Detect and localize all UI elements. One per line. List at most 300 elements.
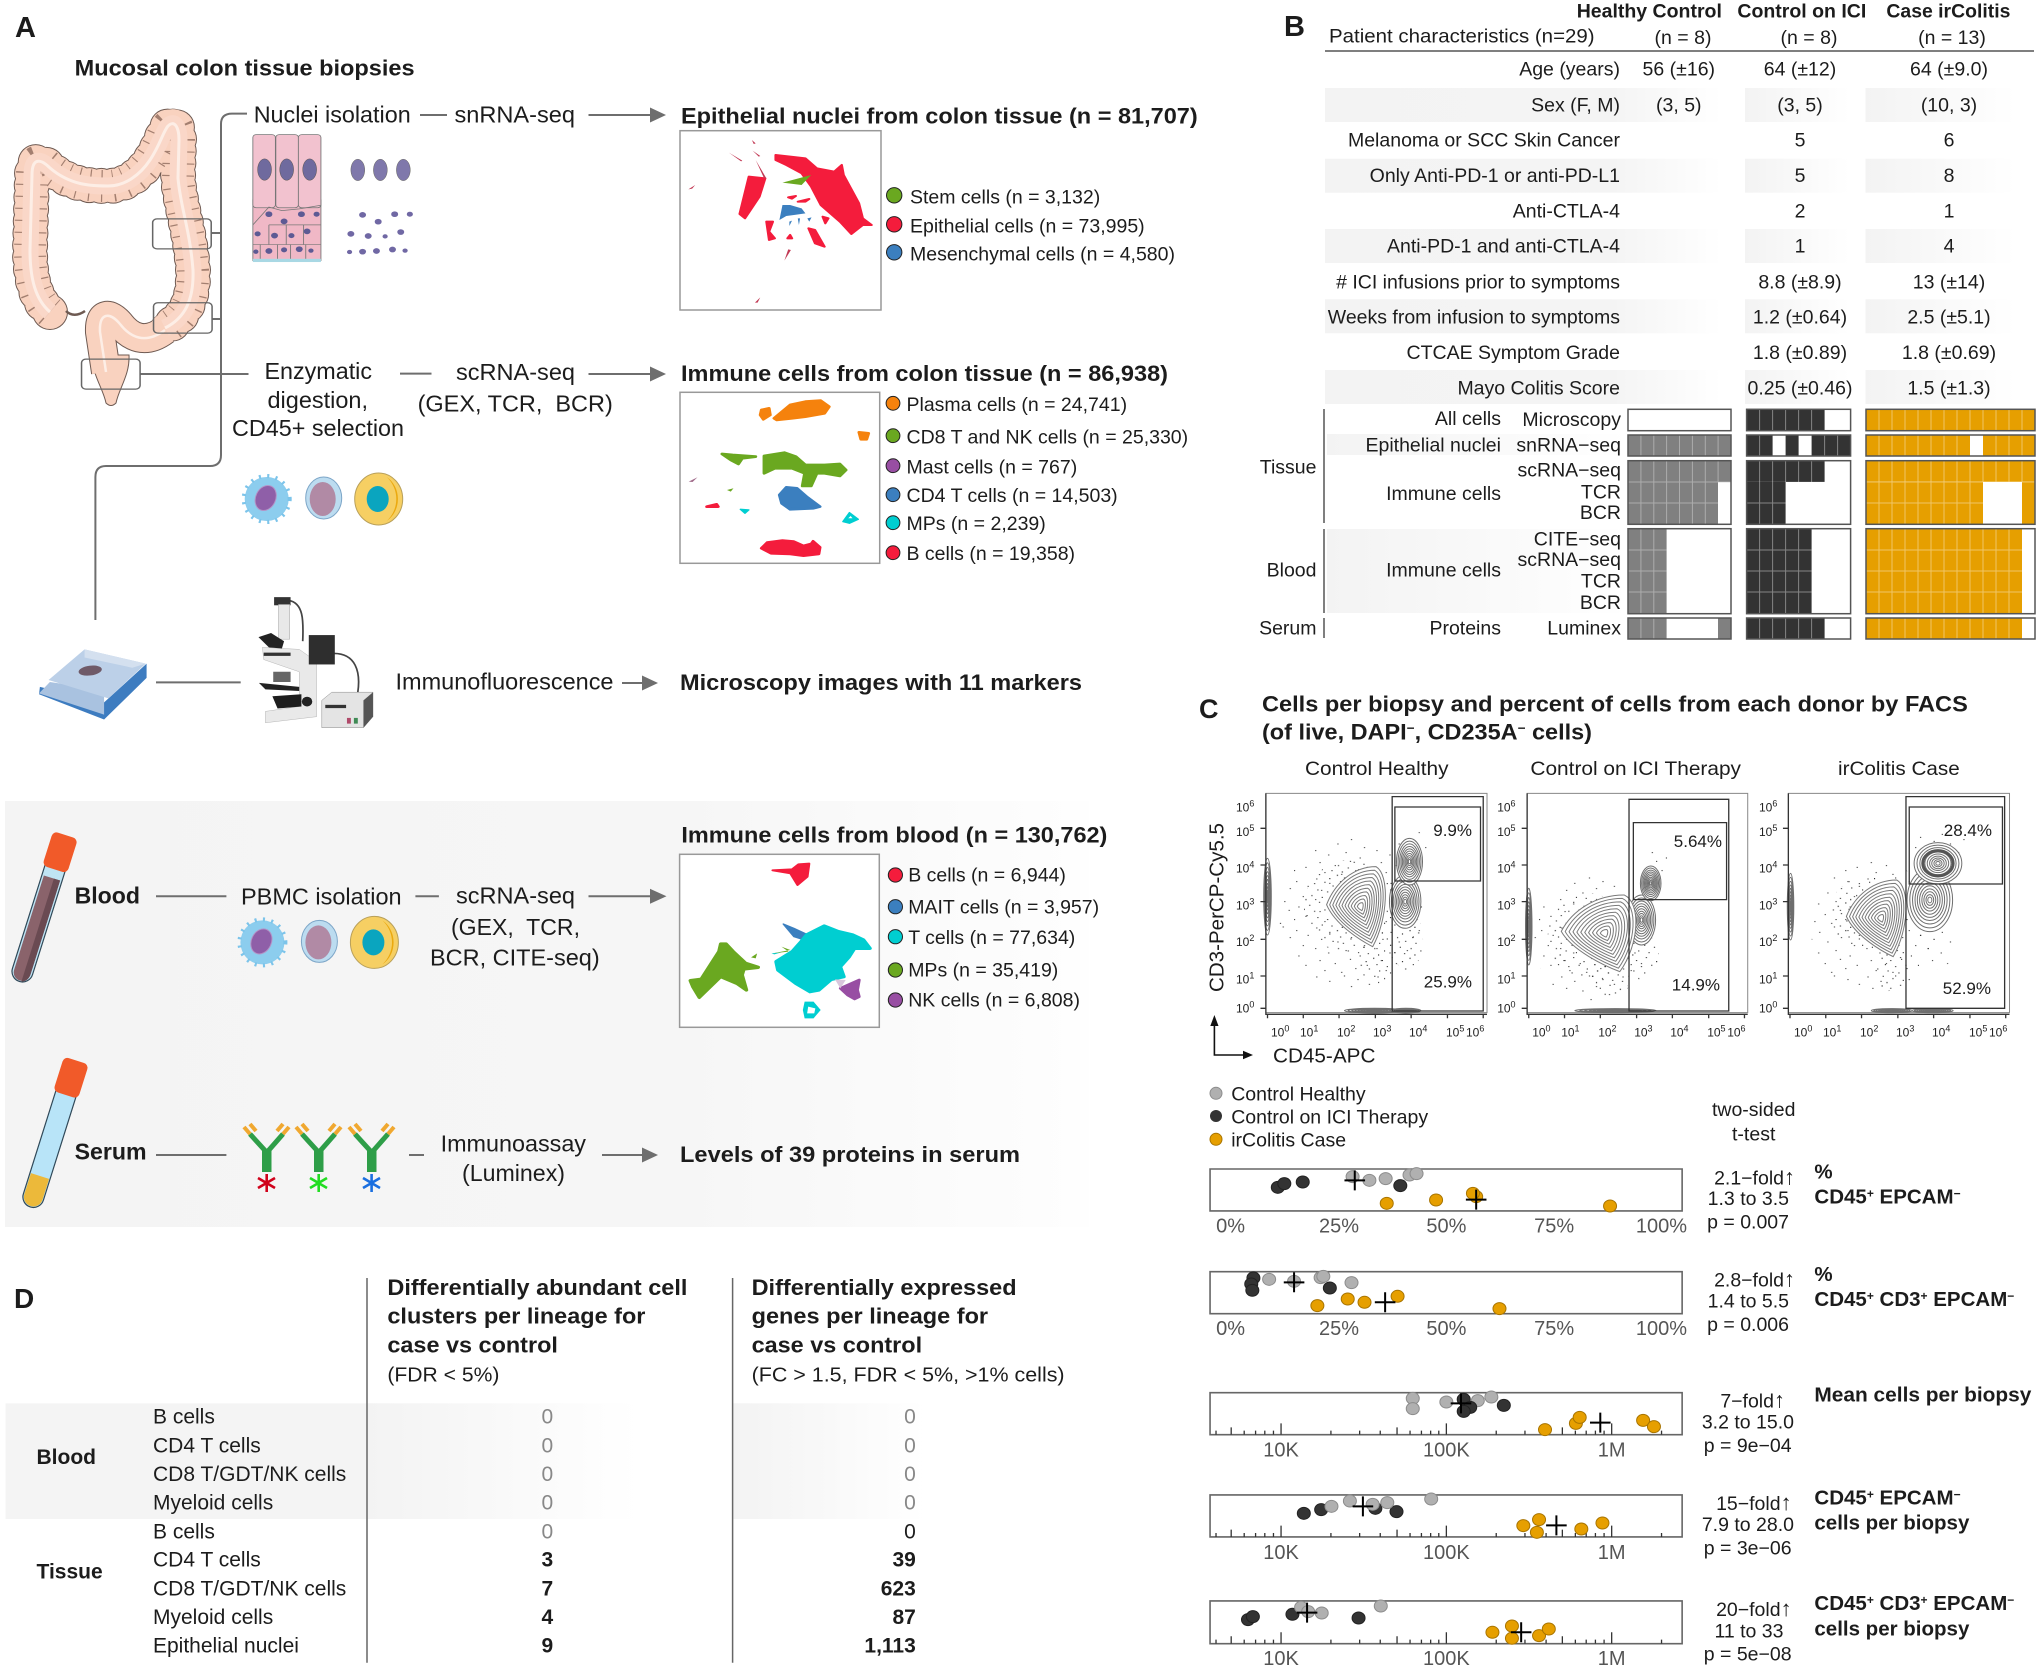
- icon: epithelial tissue and nuclei: [253, 135, 413, 262]
- flow plot: control on ICI: 4: [1511, 860, 1516, 870]
- strip plot: mean cells per biopsy: 10K: [1263, 1440, 1299, 1462]
- icon: immune cells tissue: [245, 473, 403, 525]
- sample matrix labels: Blood: [1267, 560, 1316, 582]
- strip plot: CD45+ EPCAM- cells per biopsy: −: [1954, 1487, 1961, 1501]
- sample matrix labels: scRNA−seq: [1518, 460, 1621, 482]
- chart: immune tissue UMAP: [680, 392, 880, 563]
- table values: 2.5 (±5.1): [1907, 307, 1991, 329]
- strip plot: mean cells per biopsy: p = 9e−04: [1704, 1435, 1792, 1457]
- flow plot: control healthy: 25.9%: [1424, 972, 1472, 992]
- flow plot: control on ICI: 4: [1684, 1024, 1689, 1034]
- strip plot: CD45+ EPCAM- cells per biopsy: 100K: [1423, 1542, 1470, 1564]
- y axis label: CD3-PerCP-Cy5.5: [1206, 823, 1229, 992]
- strip plot: percent CD45+ CD3+ EPCAM-: 75%: [1534, 1318, 1574, 1340]
- values: abundant clusters: 0: [542, 1434, 553, 1457]
- strip plot: percent CD45+ CD3+ EPCAM-: %: [1814, 1263, 1833, 1286]
- legend: donor groups: irColitis Case: [1231, 1130, 1346, 1152]
- values: abundant clusters: 0: [542, 1463, 553, 1486]
- flow plot: control on ICI: 10: [1497, 801, 1511, 815]
- flow plot: irColitis case: [1759, 793, 2010, 1040]
- panel A: study workflow: [7, 12, 1198, 1211]
- table row labels: [1328, 59, 1620, 399]
- strip plot: CD45+ CD3+ EPCAM- cells per biopsy: p = 5e−08: [1704, 1644, 1792, 1666]
- lineage labels: Myeloid cells: [153, 1491, 273, 1514]
- sample matrix labels: CITE−seq: [1534, 528, 1621, 550]
- label: two-sided t-test: t-test: [1732, 1124, 1776, 1146]
- lineage labels: CD4 T cells: [153, 1434, 261, 1457]
- flow plot: control healthy: 10: [1300, 1026, 1313, 1040]
- group labels: Blood: [36, 1446, 96, 1469]
- connector: blood to PBMC: [156, 895, 226, 897]
- strip plot: CD45+ CD3+ EPCAM- cells per biopsy: −: [2007, 1593, 2014, 1607]
- strip plot: percent CD45+ CD3+ EPCAM-: 25%: [1319, 1318, 1359, 1340]
- heading: FACS: , CD235A: [1415, 719, 1518, 744]
- sample matrix labels: TCR: [1581, 481, 1621, 503]
- table row labels: # ICI infusions prior to symptoms: [1336, 271, 1620, 293]
- flow plot: control healthy: 1: [1249, 970, 1254, 980]
- strip plot: percent CD45+ EPCAM-: 0%: [1216, 1215, 1245, 1237]
- flow plot: irColitis case: 10: [1759, 825, 1772, 839]
- lineage labels: CD8 T/GDT/NK cells: [153, 1463, 346, 1486]
- strip plot: percent CD45+ CD3+ EPCAM-: −: [2007, 1289, 2014, 1303]
- table header: (n = 13): [1918, 27, 1986, 49]
- panel D: differential table: [6, 1275, 1065, 1663]
- strip plot: percent CD45+ EPCAM-: [1210, 1160, 1961, 1237]
- table header: (n = 8): [1655, 27, 1711, 49]
- table values: (3, 5): [1777, 95, 1823, 117]
- label: scRNA-seq tissue: scRNA-seq: [456, 359, 575, 385]
- sample matrix labels: snRNA−seq: [1516, 435, 1621, 457]
- legend: immune tissue: MPs (n = 2,239): [906, 513, 1046, 535]
- flow plot titles: irColitis Case: [1838, 758, 1960, 780]
- table values: (3, 5): [1656, 95, 1702, 117]
- chart: epithelial UMAP: [680, 131, 881, 310]
- values: expressed genes: 0: [904, 1405, 916, 1428]
- strip plot: CD45+ CD3+ EPCAM- cells per biopsy: CD3: [1874, 1592, 1921, 1615]
- strip plot: percent CD45+ EPCAM-: CD45: [1814, 1185, 1867, 1208]
- strip plot: CD45+ EPCAM- cells per biopsy: CD45: [1814, 1486, 1867, 1509]
- flow plot: control on ICI: 10: [1497, 825, 1511, 839]
- sample matrix labels: [1259, 408, 1621, 639]
- icon: microscope: [258, 597, 373, 728]
- strip plot: CD45+ EPCAM- cells per biopsy: cells per biopsy: [1814, 1511, 1970, 1534]
- strip plot: percent CD45+ CD3+ EPCAM-: CD3: [1874, 1288, 1921, 1311]
- flow plot: control healthy: 10: [1446, 1026, 1459, 1040]
- table values: (10, 3): [1921, 95, 1977, 117]
- table header: Healthy Control: [1577, 1, 1722, 23]
- table values: 4: [1944, 236, 1955, 258]
- icon: tissue slide: [39, 649, 147, 720]
- flow plot titles: Control Healthy: [1305, 758, 1449, 780]
- lineage labels: Myeloid cells: [153, 1606, 273, 1629]
- panel letter D: D: [14, 1283, 34, 1314]
- column heading: abundant clusters: [387, 1275, 687, 1387]
- values: expressed genes: 1,113: [864, 1635, 916, 1658]
- strip plot: CD45+ CD3+ EPCAM- cells per biopsy: +: [1867, 1593, 1874, 1607]
- strip plot: percent CD45+ CD3+ EPCAM-: +: [1867, 1289, 1874, 1303]
- values: abundant clusters: 4: [542, 1606, 554, 1629]
- sample matrix: healthy control: [1628, 409, 1731, 639]
- panel letter B: B: [1284, 11, 1305, 43]
- connector: antibodies to immunoassay: [409, 1154, 424, 1156]
- flow plot: control healthy: 2: [1350, 1024, 1355, 1034]
- legend: epithelial: Mesenchymal cells (n = 4,580): [910, 244, 1175, 266]
- flow plot: irColitis case: 10: [1759, 862, 1772, 876]
- flow plot: control on ICI: 10: [1497, 1002, 1511, 1016]
- table values: [1643, 59, 1996, 399]
- icon: antibodies: [244, 1124, 394, 1192]
- strip plot: percent CD45+ EPCAM-: 25%: [1319, 1215, 1359, 1237]
- flow plot: control on ICI: 10: [1497, 972, 1511, 986]
- flow plot: control healthy: 6: [1479, 1024, 1484, 1034]
- flow plot: irColitis case: 10: [1823, 1026, 1836, 1040]
- strip plot: CD45+ EPCAM- cells per biopsy: [1210, 1486, 1970, 1564]
- table values: 64 (±9.0): [1910, 59, 1988, 81]
- table row labels: Only Anti-PD-1 or anti-PD-L1: [1370, 165, 1620, 187]
- strip plot: CD45+ CD3+ EPCAM- cells per biopsy: EPCAM: [1928, 1592, 2007, 1615]
- legend: blood: MPs (n = 35,419): [908, 960, 1058, 982]
- label: immunofluorescence: Immunofluorescence: [396, 668, 614, 694]
- table row labels: Anti-PD-1 and anti-CTLA-4: [1387, 236, 1620, 258]
- strip plot: CD45+ EPCAM- cells per biopsy: p = 3e−06: [1704, 1538, 1792, 1560]
- table values: 1: [1795, 236, 1805, 258]
- flow plot: irColitis case: 10: [1969, 1026, 1982, 1040]
- flow plot: irColitis case: 10: [1896, 1026, 1909, 1040]
- panel letter C: C: [1199, 694, 1218, 724]
- flow plot: control on ICI: 0: [1511, 1000, 1516, 1010]
- flow plot: control on ICI: 10: [1707, 1026, 1721, 1040]
- flow plot: control on ICI: 2: [1612, 1024, 1617, 1034]
- x axis label: CD45-APC: [1273, 1044, 1376, 1067]
- flow plot: irColitis case: 10: [1759, 1002, 1772, 1016]
- strip plot: CD45+ CD3+ EPCAM- cells per biopsy: 11 to 33: [1714, 1620, 1784, 1642]
- flow plot: control healthy: 3: [1249, 896, 1254, 906]
- axis arrows: [1210, 1015, 1253, 1059]
- legend: immune tissue: Plasma cells (n = 24,741): [906, 394, 1127, 416]
- label: enzymatic digestion: [232, 358, 404, 441]
- table header: Case irColitis: [1886, 1, 2011, 23]
- values: abundant clusters: 3: [542, 1549, 553, 1572]
- strip plot: percent CD45+ CD3+ EPCAM-: 100%: [1636, 1318, 1687, 1340]
- column heading: abundant clusters: (FDR < 5%): [387, 1364, 499, 1387]
- flow plot: irColitis case: 4: [1772, 860, 1777, 870]
- group labels: [36, 1446, 103, 1583]
- values: abundant clusters: 7: [542, 1577, 553, 1600]
- flow plot: irColitis case: 1: [1772, 970, 1777, 980]
- label: enzymatic digestion: digestion,: [268, 387, 368, 413]
- flow plot: control on ICI: 10: [1532, 1026, 1546, 1040]
- arrow: blood scRNA: [588, 889, 666, 904]
- strip plot: percent CD45+ EPCAM-: −: [1954, 1186, 1961, 1200]
- flow plot: control healthy: 0: [1284, 1024, 1289, 1034]
- column heading: abundant clusters: Differentially abundant cell: [387, 1275, 687, 1300]
- flow plot: control healthy: 10: [1236, 972, 1249, 986]
- table row labels: Anti-CTLA-4: [1513, 200, 1620, 222]
- flow plot: control healthy: 3: [1386, 1024, 1391, 1034]
- flow plot: control healthy: 10: [1236, 935, 1249, 949]
- legend: immune tissue: CD8 T and NK cells (n = 25,330): [906, 426, 1188, 448]
- values: expressed genes: 623: [881, 1577, 916, 1600]
- flow plot: control on ICI: 3: [1648, 1024, 1653, 1034]
- table values: 1.8 (±0.69): [1902, 342, 1996, 364]
- label: scRNA-seq tissue: (GEX, TCR, BCR): [418, 390, 613, 416]
- flow plot: control on ICI: 10: [1670, 1026, 1684, 1040]
- column heading: abundant clusters: case vs control: [387, 1332, 558, 1357]
- flow plot: control on ICI: 0: [1546, 1024, 1551, 1034]
- sample matrix labels: All cells: [1435, 408, 1501, 430]
- label: enzymatic digestion: CD45+ selection: [232, 415, 404, 441]
- heading: mucosal colon tissue biopsies: Mucosal colon tissue biopsies: [75, 56, 415, 81]
- lineage labels: CD8 T/GDT/NK cells: [153, 1577, 346, 1600]
- strip plot: percent CD45+ CD3+ EPCAM-: 1.4 to 5.5: [1708, 1291, 1789, 1313]
- strip plot: percent CD45+ EPCAM-: p = 0.007: [1707, 1211, 1789, 1233]
- heading: FACS: (of live, DAPI: [1262, 719, 1401, 744]
- strip plot: mean cells per biopsy: 7−fold↑: [1720, 1387, 1785, 1412]
- label: scRNA-seq blood: scRNA-seq: [456, 883, 575, 909]
- label: two-sided t-test: [1712, 1099, 1795, 1146]
- flow plot: irColitis case: 3: [1909, 1024, 1914, 1034]
- flow plot: control healthy: 4: [1249, 860, 1254, 870]
- legend: blood: MAIT cells (n = 3,957): [908, 896, 1099, 918]
- values: abundant clusters: 0: [542, 1405, 553, 1428]
- flow plot: irColitis case: 10: [1759, 801, 1772, 815]
- strip plot: percent CD45+ CD3+ EPCAM-: +: [1921, 1289, 1928, 1303]
- strip plot: percent CD45+ CD3+ EPCAM-: EPCAM: [1928, 1288, 2007, 1311]
- legend: immune tissue: CD4 T cells (n = 14,503): [906, 485, 1118, 507]
- legend: epithelial: [886, 186, 1175, 266]
- flow plot: control healthy: 6: [1249, 799, 1254, 809]
- sample matrix labels: Immune cells: [1386, 560, 1501, 582]
- label: immunoassay: Immunoassay: [441, 1130, 586, 1156]
- label: enzymatic digestion: Enzymatic: [264, 358, 372, 384]
- strip plot: mean cells per biopsy: [1210, 1384, 2032, 1462]
- table row labels: Mayo Colitis Score: [1457, 377, 1620, 399]
- flow plot: control healthy: 10: [1337, 1026, 1350, 1040]
- lineage labels: [153, 1405, 346, 1658]
- flow plot: irColitis case: 5: [1982, 1024, 1987, 1034]
- sample matrix labels: Luminex: [1547, 617, 1621, 639]
- flow plot: irColitis case: 2: [1772, 933, 1777, 943]
- strip plot: mean cells per biopsy: 1M: [1598, 1440, 1626, 1462]
- label: two-sided t-test: two-sided: [1712, 1099, 1795, 1121]
- strip plot: percent CD45+ EPCAM-: 2.1−fold↑: [1714, 1164, 1795, 1189]
- flow plot: irColitis case: 0: [1772, 1000, 1777, 1010]
- values: abundant clusters: 0: [542, 1491, 553, 1514]
- strip plot: CD45+ EPCAM- cells per biopsy: 15−fold↑: [1716, 1490, 1792, 1515]
- flow plot titles: Control on ICI Therapy: [1530, 758, 1741, 780]
- heading: immune cells blood: Immune cells from blood (n = 130,762): [681, 823, 1107, 848]
- flow plot: control healthy: 10: [1236, 825, 1249, 839]
- values: expressed genes: [864, 1405, 916, 1658]
- flow plot: control on ICI: 5: [1721, 1024, 1726, 1034]
- flow plot: control on ICI: 5.64%: [1674, 832, 1722, 851]
- table row labels: Weeks from infusion to symptoms: [1328, 307, 1620, 329]
- strip plot: CD45+ EPCAM- cells per biopsy: 10K: [1263, 1542, 1299, 1564]
- panel letter A: A: [15, 12, 36, 44]
- heading: FACS: [1262, 692, 1968, 744]
- flow plot: irColitis case: 10: [1989, 1026, 2002, 1040]
- heading: epithelial nuclei: Epithelial nuclei from colon tissue (n = 81,707): [681, 103, 1198, 128]
- strip plot: CD45+ CD3+ EPCAM- cells per biopsy: CD45: [1814, 1592, 1867, 1615]
- table header: [1325, 1, 2034, 51]
- values: expressed genes: 87: [892, 1606, 916, 1629]
- strip plot: percent CD45+ CD3+ EPCAM-: 50%: [1426, 1318, 1467, 1340]
- panel B: patient table: [1259, 1, 2035, 639]
- table values: 1.5 (±1.3): [1907, 377, 1991, 399]
- strip plot: percent CD45+ EPCAM-: +: [1867, 1186, 1874, 1200]
- flow plot: control on ICI: 10: [1727, 1026, 1741, 1040]
- flow plot: control on ICI: 1: [1575, 1024, 1580, 1034]
- lineage labels: CD4 T cells: [153, 1549, 261, 1572]
- flow plot: control healthy: 5: [1459, 1024, 1464, 1034]
- legend: blood: B cells (n = 6,944): [908, 865, 1066, 887]
- label: snRNA-seq: snRNA-seq: [454, 102, 575, 128]
- legend: donor groups: Control on ICI Therapy: [1231, 1106, 1428, 1128]
- flow plot: irColitis case: 28.4%: [1944, 821, 1992, 840]
- strip plot: CD45+ EPCAM- cells per biopsy: 1M: [1598, 1542, 1626, 1564]
- strip plot: percent CD45+ CD3+ EPCAM-: CD45: [1814, 1288, 1867, 1311]
- flow plot: irColitis case: 3: [1772, 896, 1777, 906]
- legend: donor groups: [1210, 1084, 1428, 1152]
- legend: blood: T cells (n = 77,634): [908, 927, 1075, 949]
- strip plot: mean cells per biopsy: 100K: [1423, 1440, 1470, 1462]
- sample matrix: control on ICI: [1747, 409, 1851, 639]
- strip plot: CD45+ CD3+ EPCAM- cells per biopsy: 100K: [1423, 1648, 1470, 1670]
- icon: serum tube: [18, 1057, 89, 1211]
- flow plot: control healthy: 5: [1249, 823, 1254, 833]
- arrow: IF to images: [622, 676, 658, 690]
- blood row bands: [6, 1403, 926, 1519]
- strip plot: CD45+ CD3+ EPCAM- cells per biopsy: cells per biopsy: [1814, 1618, 1970, 1641]
- flow plot: control healthy: 10: [1236, 862, 1249, 876]
- values: abundant clusters: 0: [542, 1520, 553, 1543]
- legend: epithelial: Epithelial cells (n = 73,995): [910, 215, 1145, 237]
- flow plot: irColitis case: 10: [1759, 898, 1772, 912]
- lineage labels: B cells: [153, 1405, 215, 1428]
- strip plot: percent CD45+ EPCAM-: 100%: [1636, 1215, 1687, 1237]
- flow plot: control healthy: [1236, 793, 1487, 1040]
- table values: 1: [1944, 200, 1954, 222]
- flow plot: control on ICI: 5: [1511, 823, 1516, 833]
- flow plot: control on ICI: 2: [1511, 933, 1516, 943]
- sample matrix labels: BCR: [1580, 592, 1621, 614]
- arrow: scRNA to immune tissue: [588, 366, 666, 382]
- connector: slide to microscope: [156, 681, 241, 683]
- column heading: expressed genes: [752, 1275, 1065, 1387]
- flow plot: control healthy: 9.9%: [1433, 821, 1472, 840]
- heading: immune cells colon: Immune cells from colon tissue (n = 86,938): [681, 361, 1168, 386]
- icon: immune cells blood: [240, 916, 398, 968]
- icon: colon: [30, 124, 212, 406]
- table header: (n = 8): [1781, 27, 1837, 49]
- flow plot: control healthy: 10: [1236, 1002, 1249, 1016]
- column heading: expressed genes: genes per lineage for: [752, 1303, 988, 1328]
- table values: 6: [1944, 130, 1954, 152]
- sample matrix labels: Proteins: [1429, 617, 1501, 639]
- flow plot: control on ICI: 10: [1634, 1026, 1648, 1040]
- flow plot: control healthy: 2: [1249, 933, 1254, 943]
- label: scRNA-seq blood: [430, 883, 600, 971]
- table row labels: CTCAE Symptom Grade: [1407, 342, 1620, 364]
- heading: FACS: cells): [1525, 719, 1592, 744]
- heading: FACS: −: [1407, 720, 1415, 735]
- values: abundant clusters: [542, 1405, 554, 1658]
- strip plot: mean cells per biopsy: 3.2 to 15.0: [1702, 1411, 1794, 1433]
- strip plot: percent CD45+ EPCAM-: 75%: [1534, 1215, 1574, 1237]
- table values: 5: [1795, 165, 1806, 187]
- values: expressed genes: 0: [904, 1520, 916, 1543]
- lineage labels: Epithelial nuclei: [153, 1635, 299, 1658]
- label: blood: Blood: [75, 883, 140, 909]
- label: scRNA-seq blood: BCR, CITE-seq): [430, 945, 600, 971]
- table values: 2: [1795, 200, 1805, 222]
- values: expressed genes: 0: [904, 1491, 916, 1514]
- strip plot: percent CD45+ EPCAM-: %: [1814, 1160, 1833, 1183]
- lineage labels: B cells: [153, 1520, 215, 1543]
- strip plot: CD45+ CD3+ EPCAM- cells per biopsy: 10K: [1263, 1648, 1299, 1670]
- heading: FACS: Cells per biopsy and percent of cells from each donor by FACS: [1262, 692, 1968, 717]
- flow plot: irColitis case: 52.9%: [1943, 979, 1991, 998]
- flow plot: control healthy: 10: [1466, 1026, 1479, 1040]
- flow plot: control on ICI: 1: [1511, 970, 1516, 980]
- table header: Patient characteristics (n=29): [1329, 26, 1595, 48]
- chart: blood UMAP: [680, 854, 879, 1027]
- label: scRNA-seq tissue: [418, 359, 613, 416]
- flow plot: control on ICI: 6: [1741, 1024, 1746, 1034]
- strip plot: mean cells per biopsy: Mean cells per biopsy: [1814, 1384, 2032, 1407]
- table values: 1.2 (±0.64): [1753, 307, 1847, 329]
- flow plot: control on ICI: 10: [1497, 898, 1511, 912]
- flow plot: control healthy: 0: [1249, 1000, 1254, 1010]
- connector: PBMC to scRNA: [415, 895, 439, 897]
- flow plot: irColitis case: 10: [1860, 1026, 1873, 1040]
- sample matrix labels: Epithelial nuclei: [1365, 435, 1501, 457]
- table row labels: Sex (F, M): [1531, 95, 1620, 117]
- values: expressed genes: 39: [892, 1549, 916, 1572]
- strip plot: CD45+ CD3+ EPCAM- cells per biopsy: [1210, 1592, 2014, 1670]
- flow plot: control on ICI: 10: [1497, 935, 1511, 949]
- legend: epithelial: Stem cells (n = 3,132): [910, 186, 1100, 208]
- sample matrix labels: Tissue: [1260, 456, 1316, 478]
- flow plot: irColitis case: 1: [1836, 1024, 1841, 1034]
- strip plot: CD45+ CD3+ EPCAM- cells per biopsy: 1M: [1598, 1648, 1626, 1670]
- label: scRNA-seq blood: (GEX, TCR,: [451, 914, 580, 940]
- table values: 56 (±16): [1643, 59, 1715, 81]
- icon: blood tube: [7, 831, 78, 985]
- table values: 5: [1795, 130, 1806, 152]
- panel C: FACS: [1199, 692, 2032, 1670]
- table row labels: Age (years): [1519, 59, 1620, 81]
- column heading: expressed genes: case vs control: [752, 1332, 922, 1357]
- legend: blood: [888, 865, 1099, 1012]
- flow plot: control healthy: 10: [1236, 898, 1249, 912]
- flow plot: irColitis case: 10: [1759, 935, 1772, 949]
- strip plot: percent CD45+ EPCAM-: 1.3 to 3.5: [1708, 1188, 1789, 1210]
- strip plot: CD45+ CD3+ EPCAM- cells per biopsy: 20−fold↑: [1716, 1596, 1792, 1621]
- label: PBMC isolation: PBMC isolation: [241, 884, 402, 910]
- values: expressed genes: 0: [904, 1463, 916, 1486]
- flow plot: control healthy: 10: [1373, 1026, 1386, 1040]
- flow plot: control on ICI: 14.9%: [1672, 976, 1720, 994]
- flow plot: control on ICI: 6: [1511, 799, 1516, 809]
- sample matrix labels: Serum: [1259, 617, 1316, 639]
- group labels: Tissue: [36, 1560, 103, 1583]
- sample matrix labels: Microscopy: [1522, 409, 1621, 431]
- label: immunoassay: (Luminex): [462, 1160, 565, 1186]
- flow plot: irColitis case: 4: [1945, 1024, 1950, 1034]
- flow plot: irColitis case: 5: [1772, 823, 1777, 833]
- arrow: immunoassay to levels: [602, 1148, 658, 1162]
